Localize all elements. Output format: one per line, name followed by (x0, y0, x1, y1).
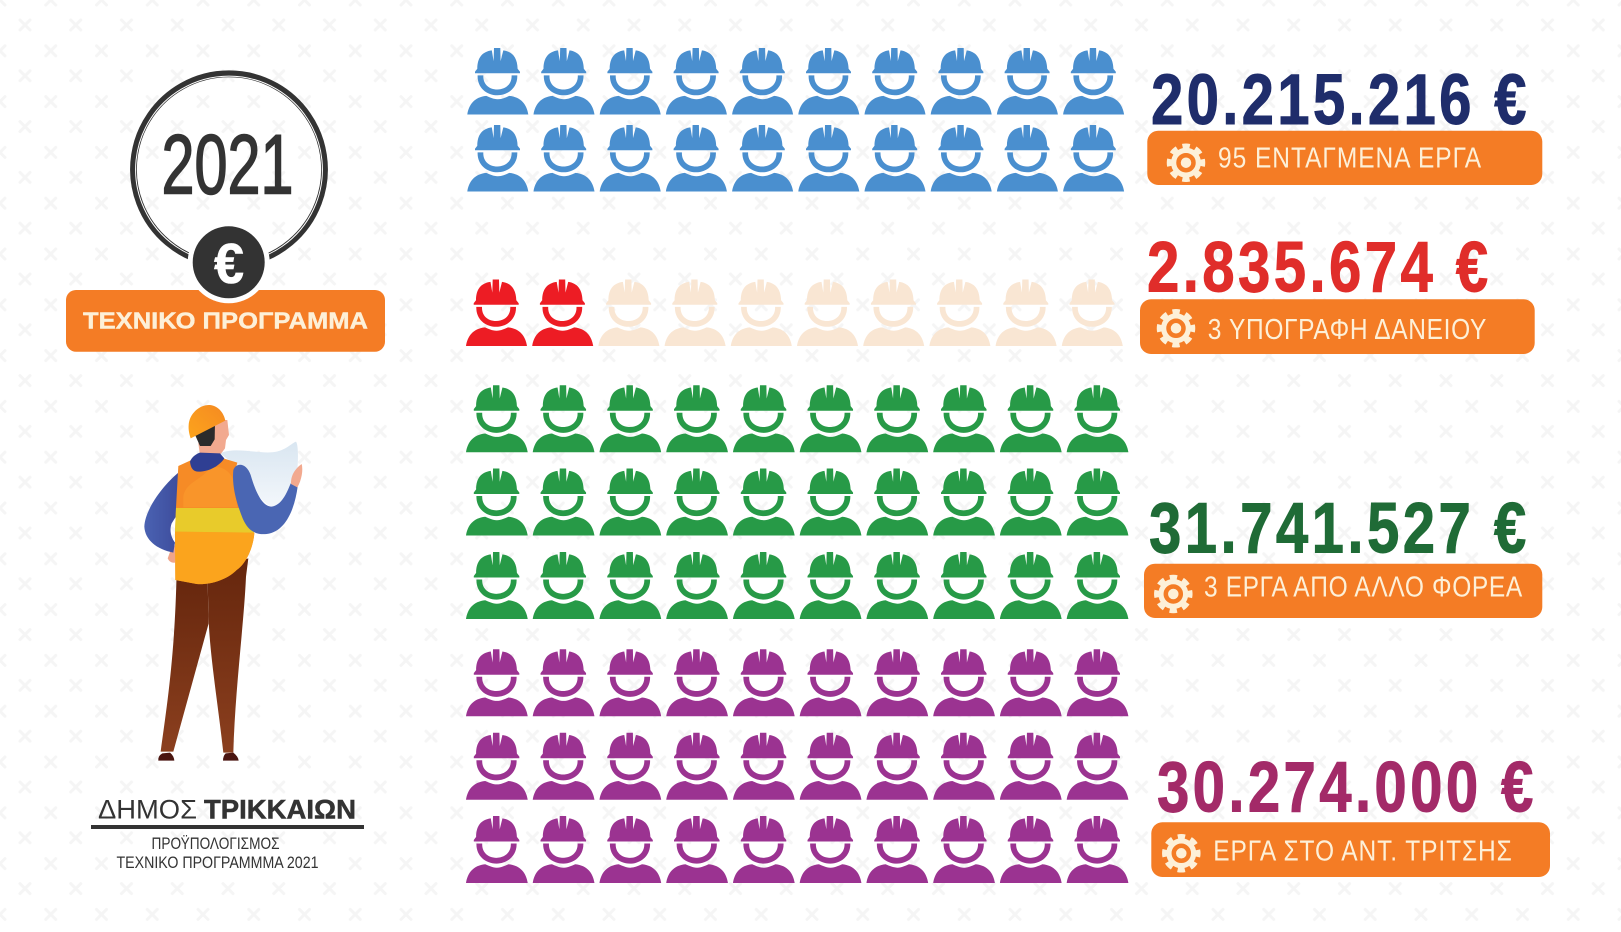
label bar: ΕΡΓΑ ΣΤΟ ΑΝΤ. ΤΡΙΤΣΗΣ (1213, 835, 1512, 867)
budget subtitle: ΠΡΟΫΠΟΛΟΓΙΣΜΟΣ (152, 835, 280, 853)
panel: loan signing amount (1140, 227, 1535, 354)
budget subtitle (116, 835, 318, 872)
amount: 31.741.527 € (1149, 488, 1526, 568)
amount: 30.274.000 € (1157, 747, 1533, 827)
amount: 20.215.216 € (1151, 59, 1527, 139)
icon: euro coin (188, 221, 270, 303)
pictogram: purple workers (466, 649, 1128, 883)
label bar (1151, 822, 1550, 877)
label bar (1144, 564, 1542, 618)
label bar (1147, 131, 1542, 185)
budget subtitle: ΤΕΧΝΙΚΟ ΠΡΟΓΡΑΜΜΜΑ 2021 (116, 854, 318, 872)
panel: entered projects amount (1147, 59, 1542, 185)
pictogram: green workers (466, 385, 1128, 619)
orange title bar (66, 290, 385, 352)
municipality heading (91, 795, 364, 829)
orange title bar: ΤΕΧΝΙΚΟ ΠΡΟΓΡΑΜΜΑ (83, 308, 368, 334)
illustration: construction worker with blueprint (144, 405, 302, 761)
municipality heading: ΤΡΙΚΚΑΙΩΝ (204, 795, 356, 825)
pictogram: red and pale workers (466, 280, 1123, 346)
panel: other agency projects amount (1144, 488, 1542, 618)
label bar: 95 ΕΝΤΑΓΜΕΝΑ ΕΡΓΑ (1218, 142, 1481, 174)
panel: Ant. Tritsis projects amount (1151, 747, 1550, 877)
label bar: 3 ΥΠΟΓΡΑΦΗ ΔΑΝΕΙΟΥ (1208, 313, 1487, 345)
label bar: 3 ΕΡΓΑ ΑΠΟ ΑΛΛΟ ΦΟΡΕΑ (1204, 571, 1522, 603)
panel: year badge (66, 74, 385, 352)
municipality heading: ΔΗΜΟΣ (98, 795, 197, 825)
icon: euro coin: € (214, 232, 244, 296)
label bar (1140, 299, 1535, 354)
amount: 2.835.674 € (1147, 227, 1488, 307)
circular ring (134, 74, 325, 262)
pictogram: blue workers (467, 48, 1124, 191)
year number: 2021 (162, 118, 294, 212)
